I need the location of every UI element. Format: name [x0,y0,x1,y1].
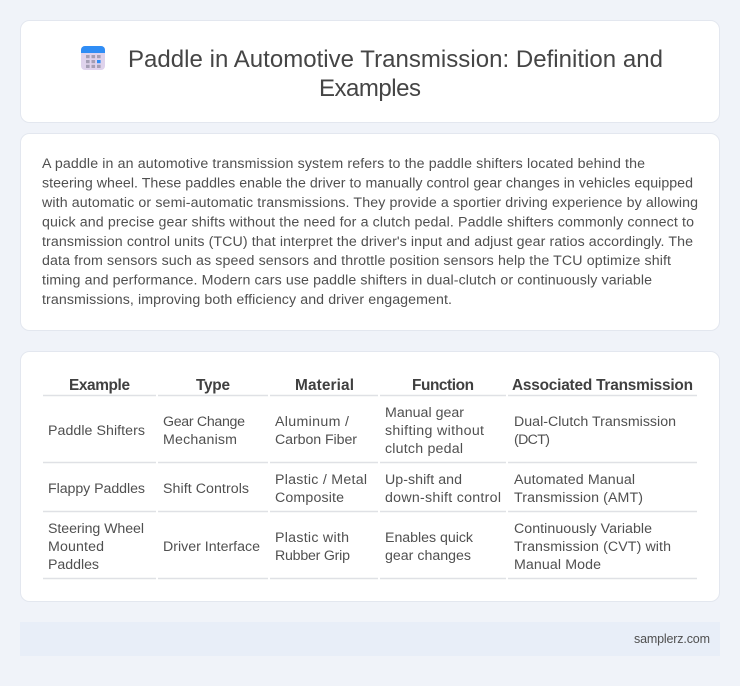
text block: paragraph [41,156,698,308]
footer [20,622,720,656]
table row: paddle shifters [48,405,676,457]
table row: flappy paddles: Up-shift and [385,472,462,488]
table row: paddle shifters: Manual gear [385,405,464,421]
table row: paddle shifters: clutch pedal [385,441,463,457]
table row: paddle shifters: Dual-Clutch Transmission [514,414,676,430]
text block: paragraph: quick and precise gear shifts without the need for a clutch pedal. Paddle shifters commonly connect to [42,214,694,230]
table row: paddle shifters: Aluminum / [275,414,349,430]
table row: paddle shifters: Mechanism [163,432,237,448]
table row: flappy paddles: Plastic / Metal [275,472,367,488]
table header row: Example [69,377,130,394]
table row: steering wheel mounted paddles: Mounted [48,539,104,555]
table row: flappy paddles [48,472,643,506]
table row: flappy paddles: Automated Manual [514,472,635,488]
table row: steering wheel mounted paddles: Enables quick [385,530,474,546]
title [128,46,663,102]
table header row: Type [196,377,230,394]
table row: flappy paddles: down-shift control [385,490,501,506]
title: Examples [319,75,421,102]
panel: table [20,352,720,602]
table row: flappy paddles: Flappy Paddles [48,481,145,497]
table row: steering wheel mounted paddles: Rubber Grip [275,548,350,564]
table row: paddle shifters: Carbon Fiber [275,432,357,448]
table row: flappy paddles: Composite [275,490,344,506]
table row: steering wheel mounted paddles: gear changes [385,548,471,564]
text block: paragraph: data from sensors such as speed sensors and throttle position sensors help the TCU optimize shift [42,253,671,269]
table header row: Associated Transmission [512,377,693,394]
text block: paragraph: transmission control units (TCU) that interpret the driver's input and adjust gear ratios accordingly. The [42,234,693,250]
title: Paddle in Automotive Transmission: Definition and [128,46,663,73]
panel: header [20,20,720,122]
table header row: Material [295,377,354,394]
table row: flappy paddles: Shift Controls [163,481,249,497]
table row: flappy paddles: Transmission (AMT) [514,490,643,506]
table row: steering wheel mounted paddles: Driver Interface [163,539,260,555]
footer: samplerz.com [634,632,710,646]
table row: steering wheel mounted paddles: Plastic with [275,530,349,546]
table row: steering wheel mounted paddles [48,521,671,573]
icon: calendar [81,46,105,70]
table row: paddle shifters: shifting without [385,423,484,439]
table row: steering wheel mounted paddles: Manual Mode [514,557,601,573]
table row: paddle shifters: (DCT) [514,432,550,448]
table row: steering wheel mounted paddles: Transmission (CVT) with [514,539,671,555]
table row: steering wheel mounted paddles: Paddles [48,557,99,573]
table header row: Function [412,377,474,394]
text block: paragraph: timing and performance. Modern cars use paddle shifters in dual-clutch or continuously variable [42,273,652,289]
panel: description [20,134,720,330]
table row: paddle shifters: Gear Change [163,414,245,430]
text block: paragraph: steering wheel. These paddles enable the driver to manually control gear changes in vehicles equipped [42,175,693,191]
text block: paragraph: A paddle in an automotive transmission system refers to the paddle shifters located behind the [42,156,645,172]
text block: paragraph: with automatic or semi-automatic transmissions. They provide a sportier driving experience by allowing [41,195,698,211]
text block: paragraph: transmissions, improving both efficiency and driver engagement. [42,292,452,308]
table row: steering wheel mounted paddles: Continuously Variable [514,521,652,537]
table row: paddle shifters: Paddle Shifters [48,423,145,439]
table row: steering wheel mounted paddles: Steering Wheel [48,521,144,537]
table header row [69,377,693,394]
